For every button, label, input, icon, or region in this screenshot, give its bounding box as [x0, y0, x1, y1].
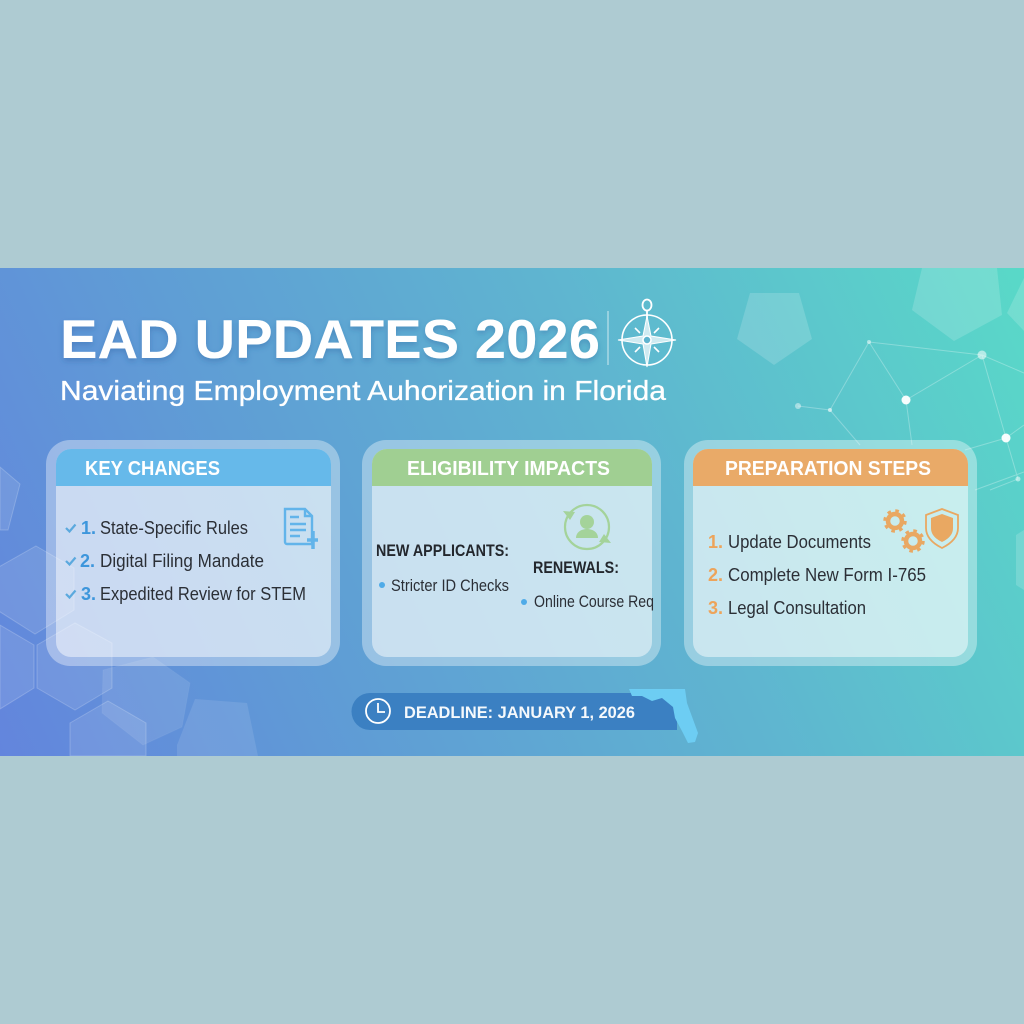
deadline banner [352, 689, 698, 743]
title: EAD UPDATES 2026 [60, 308, 600, 370]
header: preparation steps: PREPARATION STEPS [725, 458, 931, 480]
panel: eligibility impacts [362, 440, 661, 666]
list: key changes: Digital Filing Mandate [100, 551, 264, 571]
icon: clock [366, 699, 390, 723]
list: preparation steps: 3. [708, 598, 723, 618]
header: eligibility impacts [372, 449, 652, 486]
column: new applicants: Stricter ID Checks [391, 577, 509, 595]
list: preparation steps: 1. [708, 532, 723, 552]
list: key changes: 3. [81, 584, 96, 604]
column: renewals: Online Course Req [534, 593, 654, 611]
list: key changes: State-Specific Rules [100, 518, 248, 538]
panel: key changes [46, 440, 340, 666]
header: key changes: KEY CHANGES [85, 458, 220, 480]
column: renewals: RENEWALS: [533, 558, 619, 577]
list: preparation steps: Update Documents [728, 532, 871, 552]
column: renewals [521, 558, 654, 611]
icon: florida map [629, 689, 698, 743]
header: key changes [56, 449, 331, 486]
list: key changes [66, 518, 306, 604]
list: preparation steps: 2. [708, 565, 723, 585]
header: preparation steps [693, 449, 968, 486]
icon: renewal person [563, 505, 611, 549]
subtitle: Naviating Employment Auhorization in Florida [60, 375, 666, 406]
deadline text: DEADLINE: JANUARY 1, 2026 [404, 703, 635, 722]
column: new applicants: NEW APPLICANTS: [376, 541, 509, 560]
icon: compass [608, 300, 676, 367]
banner background [0, 268, 1024, 756]
icon: document [285, 509, 318, 549]
list: preparation steps: Complete New Form I-765 [728, 565, 926, 585]
panel: preparation steps [684, 440, 977, 666]
header: eligibility impacts: ELIGIBILITY IMPACTS [407, 458, 610, 480]
icon: gears and shield [885, 509, 958, 551]
column: new applicants [376, 541, 509, 595]
list: key changes: Expedited Review for STEM [100, 584, 306, 604]
list: key changes: 1. [81, 518, 96, 538]
list: preparation steps: Legal Consultation [728, 598, 866, 618]
list: key changes: 2. [80, 551, 95, 571]
list: preparation steps [708, 532, 926, 618]
decorative shapes [0, 268, 1024, 756]
